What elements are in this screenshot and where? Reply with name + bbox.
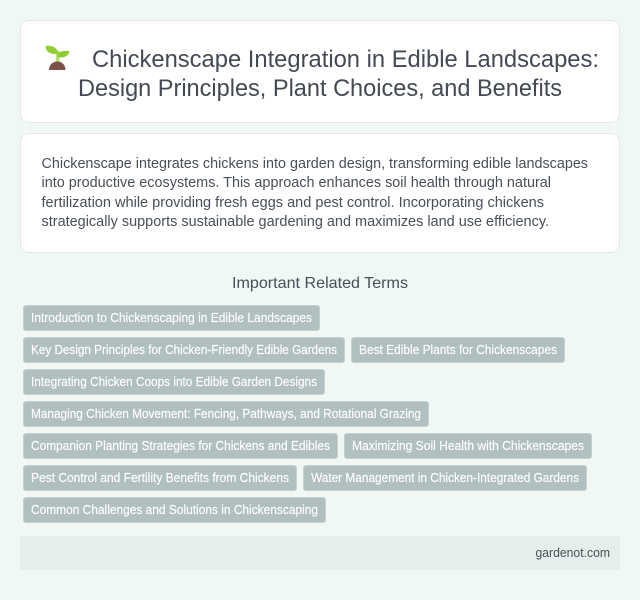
tag: Key Design Principles for Chicken-Friendly Edible Gardens <box>31 342 337 357</box>
tag: Common Challenges and Solutions in Chickenscaping <box>31 502 318 517</box>
tag: Best Edible Plants for Chickenscapes <box>359 342 557 357</box>
text block: description: Chickenscape integrates chickens into garden design, transforming edible landscapes <box>42 156 588 172</box>
tag <box>24 434 338 458</box>
tag <box>24 306 320 330</box>
title: Design Principles, Plant Choices, and Benefits <box>78 75 562 102</box>
panel: title card <box>20 20 620 122</box>
footer: gardenot.com <box>536 546 610 560</box>
tag: Integrating Chicken Coops into Edible Garden Designs <box>31 374 317 389</box>
text block: description: strategically supports sustainable gardening and maximizes land use efficiency. <box>42 214 549 230</box>
heading: related terms: Important Related Terms <box>232 275 408 292</box>
tag: Companion Planting Strategies for Chickens and Edibles <box>31 438 330 453</box>
title <box>78 46 599 102</box>
tag <box>304 466 586 490</box>
tag <box>352 338 564 362</box>
tag: Maximizing Soil Health with Chickenscapes <box>352 438 584 453</box>
tag list <box>24 306 592 522</box>
tag: Managing Chicken Movement: Fencing, Pathways, and Rotational Grazing <box>31 406 421 421</box>
tag <box>344 434 592 458</box>
text block: description <box>42 156 588 230</box>
footer <box>20 536 620 570</box>
tag: Introduction to Chickenscaping in Edible Landscapes <box>31 310 312 325</box>
tag <box>24 498 326 522</box>
tag <box>24 370 324 394</box>
title: Chickenscape Integration in Edible Landscapes: <box>92 46 599 73</box>
tag <box>24 402 428 426</box>
icon: sprout <box>46 46 70 70</box>
text block: description: fertilization while providing fresh eggs and pest control. Incorporating chickens <box>42 195 544 211</box>
tag <box>24 466 296 490</box>
panel: introduction text <box>20 134 620 252</box>
tag <box>24 338 344 362</box>
tag: Water Management in Chicken-Integrated Gardens <box>311 470 579 485</box>
text block: description: into productive ecosystems. This approach enhances soil health through natural <box>42 175 551 191</box>
tag: Pest Control and Fertility Benefits from Chickens <box>31 470 289 485</box>
